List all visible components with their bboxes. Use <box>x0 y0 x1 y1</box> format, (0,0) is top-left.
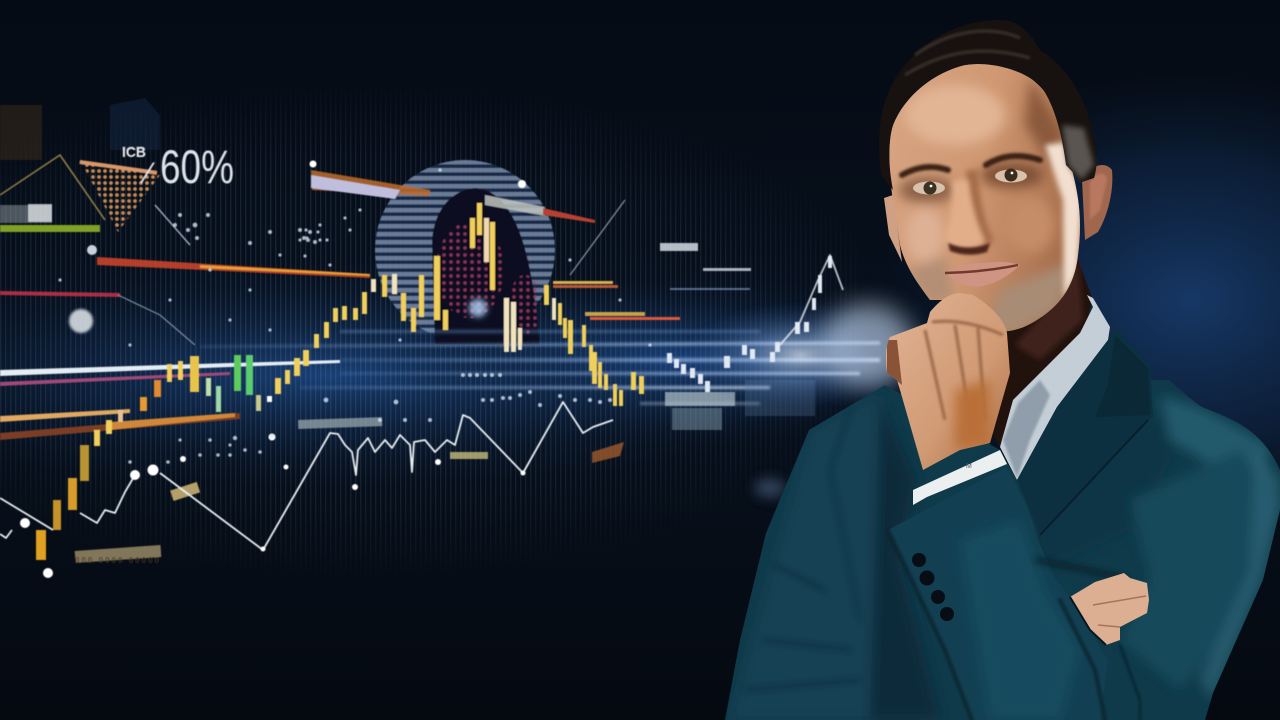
lapel seam <box>1040 420 1148 535</box>
neck <box>975 260 1093 447</box>
grey side hair <box>1062 125 1094 180</box>
hair highlights <box>905 31 1030 75</box>
mouth <box>945 262 1020 287</box>
background <box>0 85 1280 566</box>
forearm sleeve <box>889 479 1055 596</box>
shirt cuff: M <box>966 463 972 470</box>
percentage label: ICB <box>122 144 146 161</box>
soft white smudge <box>754 478 786 498</box>
chest <box>1020 410 1200 570</box>
circular striped globe <box>375 160 555 345</box>
lower hand <box>1070 573 1149 645</box>
shirt cuff <box>913 450 1007 505</box>
shirt collar <box>1000 295 1110 480</box>
candlestick chart <box>36 203 832 560</box>
white price line: 000 0000 00000 <box>75 556 160 565</box>
light streaks <box>0 170 880 563</box>
percentage label: 60% <box>160 140 234 193</box>
face <box>889 64 1080 332</box>
right shoulder highlight <box>1160 395 1270 480</box>
percentage label: ⁄ <box>139 157 155 190</box>
ear right <box>1082 165 1112 240</box>
percentage label <box>122 140 234 193</box>
lapel <box>1018 328 1153 492</box>
scattered data particles <box>58 168 652 464</box>
beam of light toward the man <box>680 300 920 410</box>
hair <box>879 20 1097 190</box>
white price line <box>0 160 843 578</box>
knuckle lines <box>925 321 1003 420</box>
glowing orb <box>69 309 93 333</box>
ear left <box>884 195 902 262</box>
chin hand <box>886 293 1010 470</box>
stubble <box>990 261 1069 332</box>
decorative hexagon, pyramid and orange triangle <box>0 98 190 245</box>
neck light <box>1015 262 1083 360</box>
panel: market data visualisation <box>0 98 920 578</box>
nose <box>966 170 994 248</box>
eyebrows <box>902 156 1040 175</box>
man in teal suit <box>720 20 1280 720</box>
cheeks <box>905 207 945 263</box>
cheek highlight <box>1045 142 1082 300</box>
arm folds <box>750 529 1142 720</box>
jacket buttons <box>912 553 954 621</box>
left shoulder and arm shading <box>738 403 891 717</box>
suit jacket <box>720 328 1280 720</box>
eye shadows <box>899 177 955 203</box>
eyes <box>913 168 1027 194</box>
forehead light <box>905 85 1005 145</box>
